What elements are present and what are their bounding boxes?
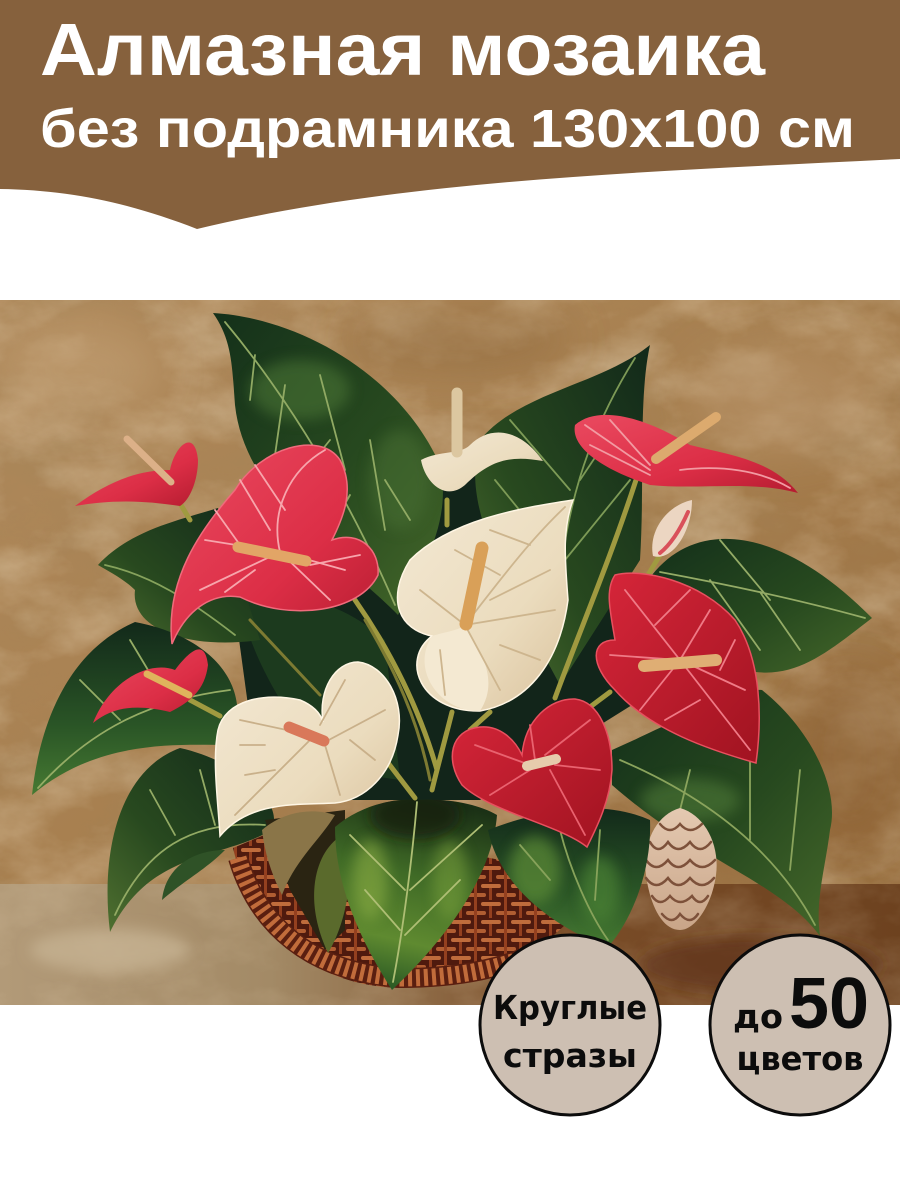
leaf: bottom right of center bbox=[488, 808, 650, 947]
subtitle: без подрамника 130х100 см bbox=[40, 99, 855, 159]
picture: anthurium bouquet in a basket bbox=[0, 300, 900, 1005]
flower: small red left bbox=[75, 439, 198, 506]
badge: round rhinestones bbox=[480, 935, 660, 1115]
badge: up to 50 colours: цветов bbox=[736, 1039, 864, 1078]
flower: big red left bbox=[171, 445, 378, 644]
leaf: dark filler bbox=[265, 810, 345, 950]
badge: round rhinestones: Круглые bbox=[493, 988, 647, 1027]
leaf: brown left of center bbox=[262, 811, 335, 895]
flower: cream lower left bbox=[215, 662, 399, 836]
leaf: lower right big bbox=[612, 690, 832, 936]
flower: small cream top bbox=[421, 393, 543, 491]
leaf: right bbox=[652, 539, 872, 673]
leaves bbox=[32, 313, 872, 936]
badge: up to 50 colours: до bbox=[733, 997, 783, 1036]
title: Алмазная мозаика bbox=[40, 8, 766, 91]
leaf: small lower left bbox=[162, 850, 225, 900]
flower: big red right bbox=[596, 573, 759, 763]
leaf: far left bbox=[32, 622, 238, 795]
leaf: middle dark left bbox=[240, 596, 400, 780]
badge: round rhinestones: стразы bbox=[503, 1036, 637, 1075]
flower: small bud right bbox=[652, 500, 692, 557]
leaf: center bottom bbox=[335, 791, 497, 990]
header banner bbox=[0, 0, 900, 229]
flower: big cream center bbox=[397, 500, 573, 711]
leaf: top right bbox=[475, 345, 650, 685]
basket bbox=[233, 820, 565, 988]
flower: red top right bbox=[575, 415, 798, 493]
leaf: upper left bbox=[98, 508, 260, 643]
badge: up to 50 colours: 50 bbox=[789, 964, 869, 1044]
leaf: olive left of center bbox=[314, 840, 347, 953]
leaf: lower left bbox=[108, 748, 274, 932]
leaf: top left bbox=[213, 313, 443, 615]
leaves in front of basket bbox=[262, 791, 650, 990]
pine cone bbox=[645, 808, 717, 930]
badge: up to 50 colours bbox=[710, 935, 890, 1115]
stems bbox=[178, 480, 660, 798]
flower: red center bottom bbox=[452, 699, 612, 847]
flower: small red lower left bbox=[93, 649, 208, 723]
